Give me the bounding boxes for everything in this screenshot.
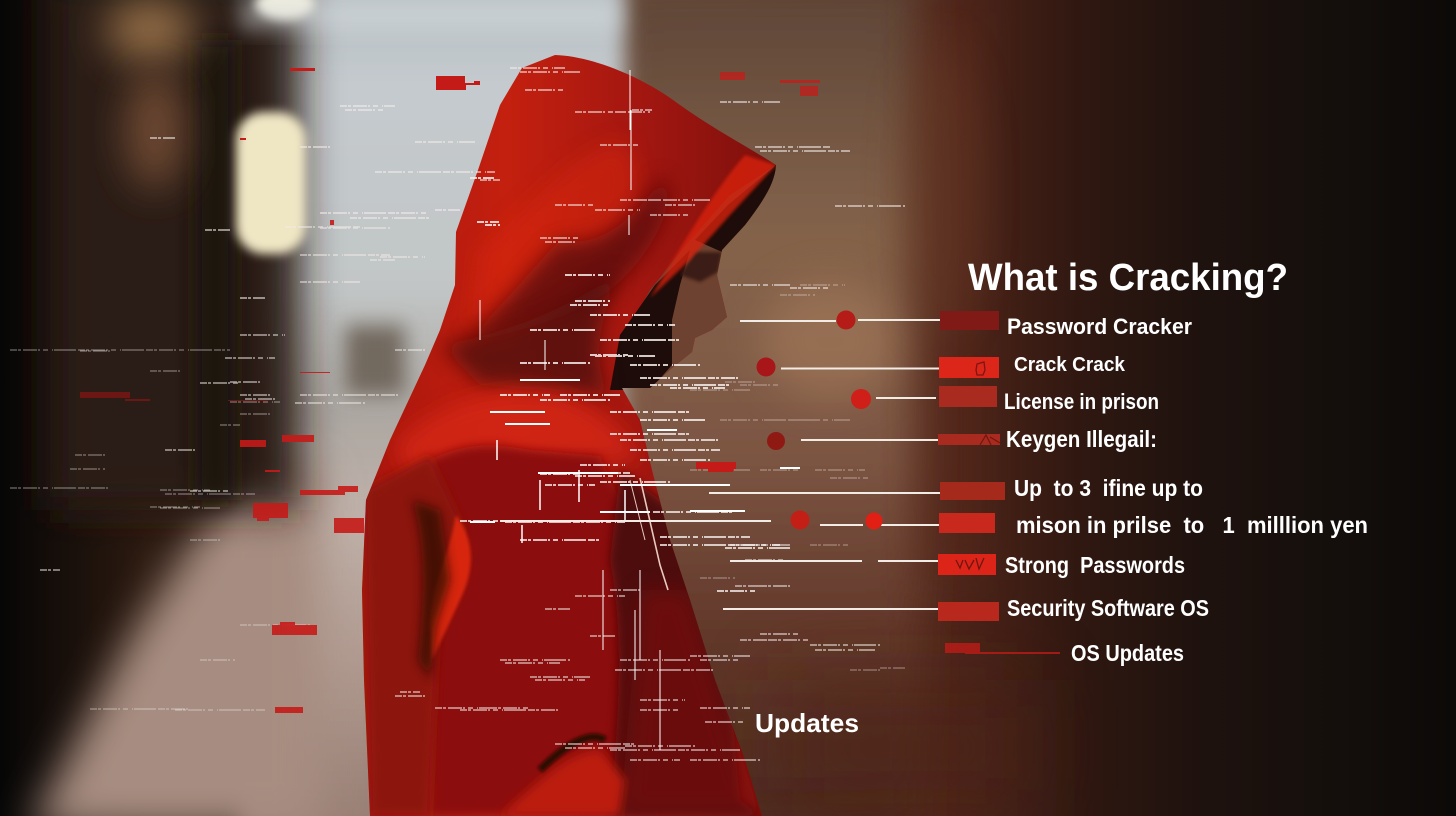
label list	[755, 314, 1368, 738]
glitch: white data streaks	[10, 68, 905, 760]
bar 6	[939, 513, 995, 533]
label: Password Cracker: Password Cracker	[1007, 314, 1192, 339]
label: Security Software OS: Security Software OS	[1007, 595, 1209, 621]
line: Password Cracker	[740, 310, 940, 330]
line: Strong Passwords	[730, 560, 938, 562]
label: Crack Crack: Crack Crack	[1014, 354, 1126, 376]
line: Up to 3	[709, 492, 940, 494]
callout lines and dots	[500, 310, 940, 609]
glitch: red data fragments	[80, 68, 1060, 713]
bar 7 with glyphs	[938, 554, 996, 575]
hood inner shadow and face	[615, 165, 776, 390]
label: License in prison: License in prison	[1004, 389, 1159, 414]
hoodie folds	[476, 141, 642, 312]
bar 5	[940, 482, 1005, 500]
bar 4 with icon	[938, 434, 1000, 445]
glitch: bright white scan lines	[470, 70, 800, 750]
line: Keygen Illegal	[767, 432, 938, 450]
title: What is Cracking?	[968, 257, 1288, 299]
bar 1	[940, 311, 999, 330]
bar 3	[939, 386, 997, 407]
line: Security Software	[723, 608, 938, 610]
line: Crack Crack	[756, 358, 939, 376]
line: prison to 1 million yen	[500, 510, 940, 530]
red label bars	[938, 311, 1005, 621]
label: prison to 1 million yen: mison in prilse to 1 milllion yen	[1016, 512, 1368, 538]
label: Up to 3 fine up to: Up to 3 ifine up to	[1014, 475, 1203, 501]
figure: hooded person in profile	[362, 55, 776, 816]
bar 8	[938, 602, 999, 621]
line: License in prison	[851, 389, 936, 409]
hoodie silhouette	[362, 55, 776, 816]
bar 2 with icon	[939, 357, 999, 378]
label: OS Updates: OS Updates	[1071, 640, 1184, 666]
label: Keygen Illegal: Keygen Illegail:	[1006, 426, 1157, 452]
label: Strong Passwords: Strong Passwords	[1005, 552, 1185, 578]
label: Updates: Updates	[755, 708, 859, 738]
